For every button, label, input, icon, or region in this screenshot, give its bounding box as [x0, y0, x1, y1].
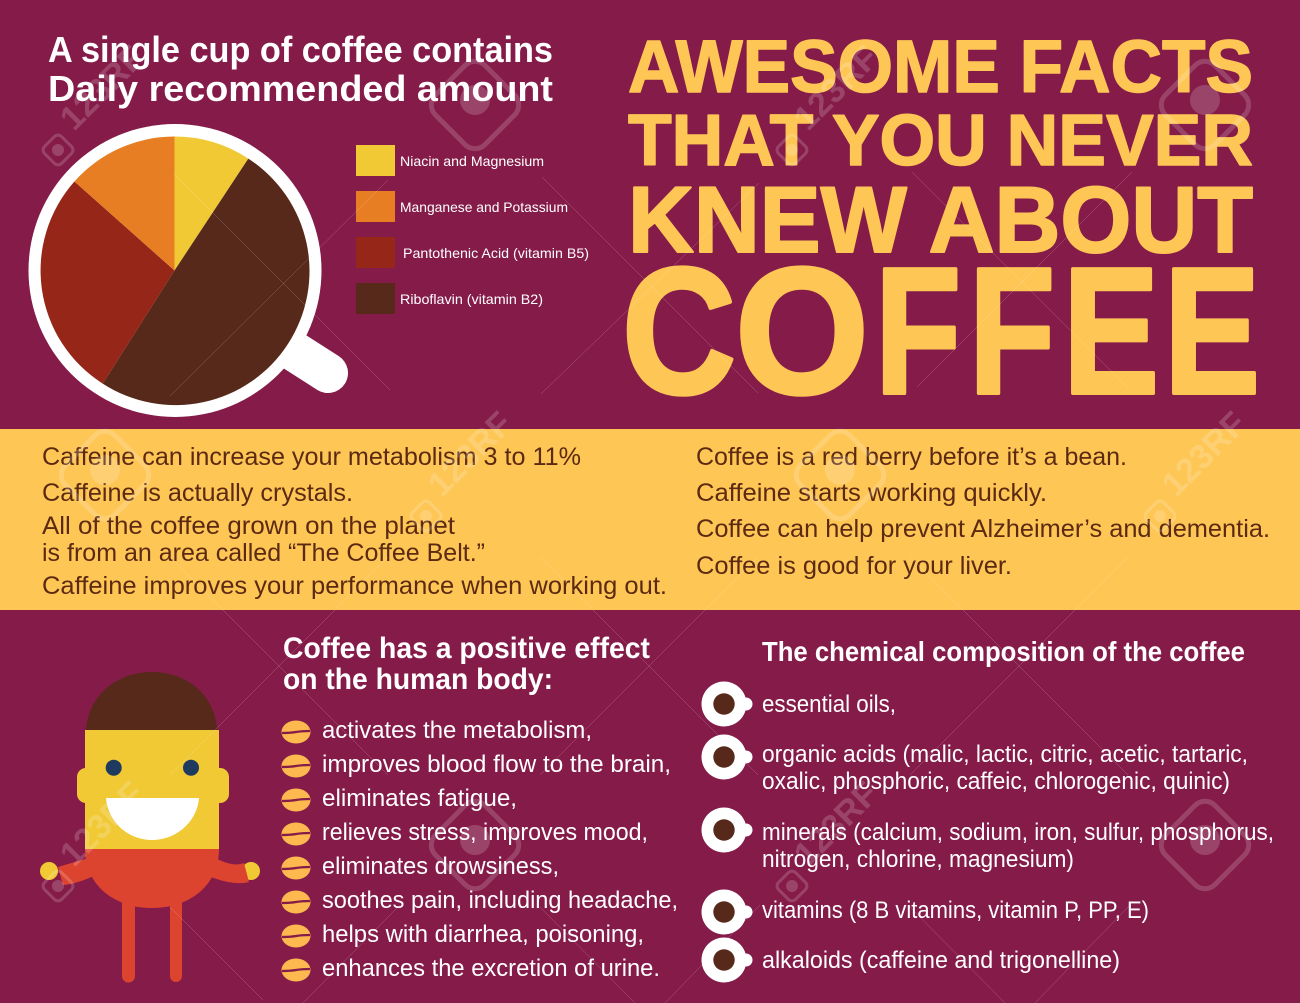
panel: chemical composition — [702, 636, 1274, 982]
title: E — [1063, 231, 1159, 432]
composition list: organic acids (malic, lactic, citric, acetic, tartaric, — [762, 741, 1248, 768]
facts left column: All of the coffee grown on the planet — [42, 512, 455, 540]
facts right column: Coffee can help prevent Alzheimer’s and dementia. — [696, 515, 1270, 543]
chart legend: Riboflavin (vitamin B2) — [400, 291, 543, 307]
composition list: nitrogen, chlorine, magnesium) — [762, 846, 1074, 873]
panel: nutrient chart — [28, 29, 589, 417]
coffee cup pie chart — [28, 124, 328, 417]
facts right column: Coffee is good for your liver. — [696, 552, 1012, 580]
composition list: minerals (calcium, sodium, iron, sulfur, phosphorus, — [762, 819, 1274, 846]
effects list: eliminates fatigue, — [322, 785, 517, 812]
composition heading: The chemical composition of the coffee — [762, 636, 1245, 667]
effects list — [322, 717, 678, 982]
facts left column: is from an area called “The Coffee Belt.” — [42, 539, 485, 567]
watermarks: 123RF — [787, 39, 886, 138]
title: THAT YOU NEVER — [628, 101, 1253, 181]
cup bullets — [702, 682, 752, 982]
facts right column: Caffeine starts working quickly. — [696, 479, 1047, 507]
panel: positive effects — [282, 632, 678, 982]
chart legend — [356, 145, 589, 314]
effects heading: Coffee has a positive effect — [283, 632, 650, 665]
effects list: soothes pain, including headache, — [322, 887, 678, 914]
composition list: alkaloids (caffeine and trigonelline) — [762, 947, 1120, 974]
composition list: essential oils, — [762, 691, 896, 718]
effects list: helps with diarrhea, poisoning, — [322, 921, 644, 948]
effects heading — [283, 632, 650, 696]
chart heading: A single cup of coffee contains — [48, 29, 553, 70]
composition list — [762, 691, 1274, 974]
chart heading — [48, 29, 553, 109]
watermarks: 123RF — [1155, 405, 1254, 504]
effects list: relieves stress, improves mood, — [322, 819, 648, 846]
title: C — [622, 231, 736, 432]
title: O — [735, 231, 869, 432]
title: F — [969, 231, 1055, 432]
effects list: improves blood flow to the brain, — [322, 751, 671, 778]
facts left column: Caffeine improves your performance when working out. — [42, 572, 667, 600]
facts left column — [42, 443, 667, 600]
panel: facts band — [0, 429, 1300, 610]
chart legend: Manganese and Potassium — [400, 199, 568, 215]
coffee bean bullets — [282, 720, 310, 982]
character: smiling person — [40, 672, 260, 983]
effects list: enhances the excretion of urine. — [322, 955, 660, 982]
watermarks: 123RF — [421, 405, 520, 504]
watermarks: 123RF — [53, 39, 152, 138]
title: E — [1164, 231, 1260, 432]
title: F — [875, 231, 961, 432]
facts right column: Coffee is a red berry before it’s a bean. — [696, 443, 1127, 471]
effects list: activates the metabolism, — [322, 717, 592, 744]
watermarks: 123RF — [787, 775, 886, 874]
title: KNEW ABOUT — [628, 167, 1253, 272]
composition list: vitamins (8 B vitamins, vitamin P, PP, E) — [762, 897, 1149, 924]
effects list: eliminates drowsiness, — [322, 853, 559, 880]
title — [622, 25, 1260, 432]
watermarks: 123RF — [53, 775, 152, 874]
facts left column: Caffeine is actually crystals. — [42, 479, 353, 507]
effects heading: on the human body: — [283, 663, 553, 696]
chart legend: Niacin and Magnesium — [400, 153, 544, 169]
chart legend: Pantothenic Acid (vitamin B5) — [403, 245, 589, 261]
facts right column — [696, 443, 1270, 580]
facts left column: Caffeine can increase your metabolism 3 to 11% — [42, 443, 581, 471]
title: AWESOME FACTS — [628, 25, 1253, 108]
composition list: oxalic, phosphoric, caffeic, chlorogenic, quinic) — [762, 768, 1230, 795]
chart heading: Daily recommended amount — [48, 68, 553, 109]
